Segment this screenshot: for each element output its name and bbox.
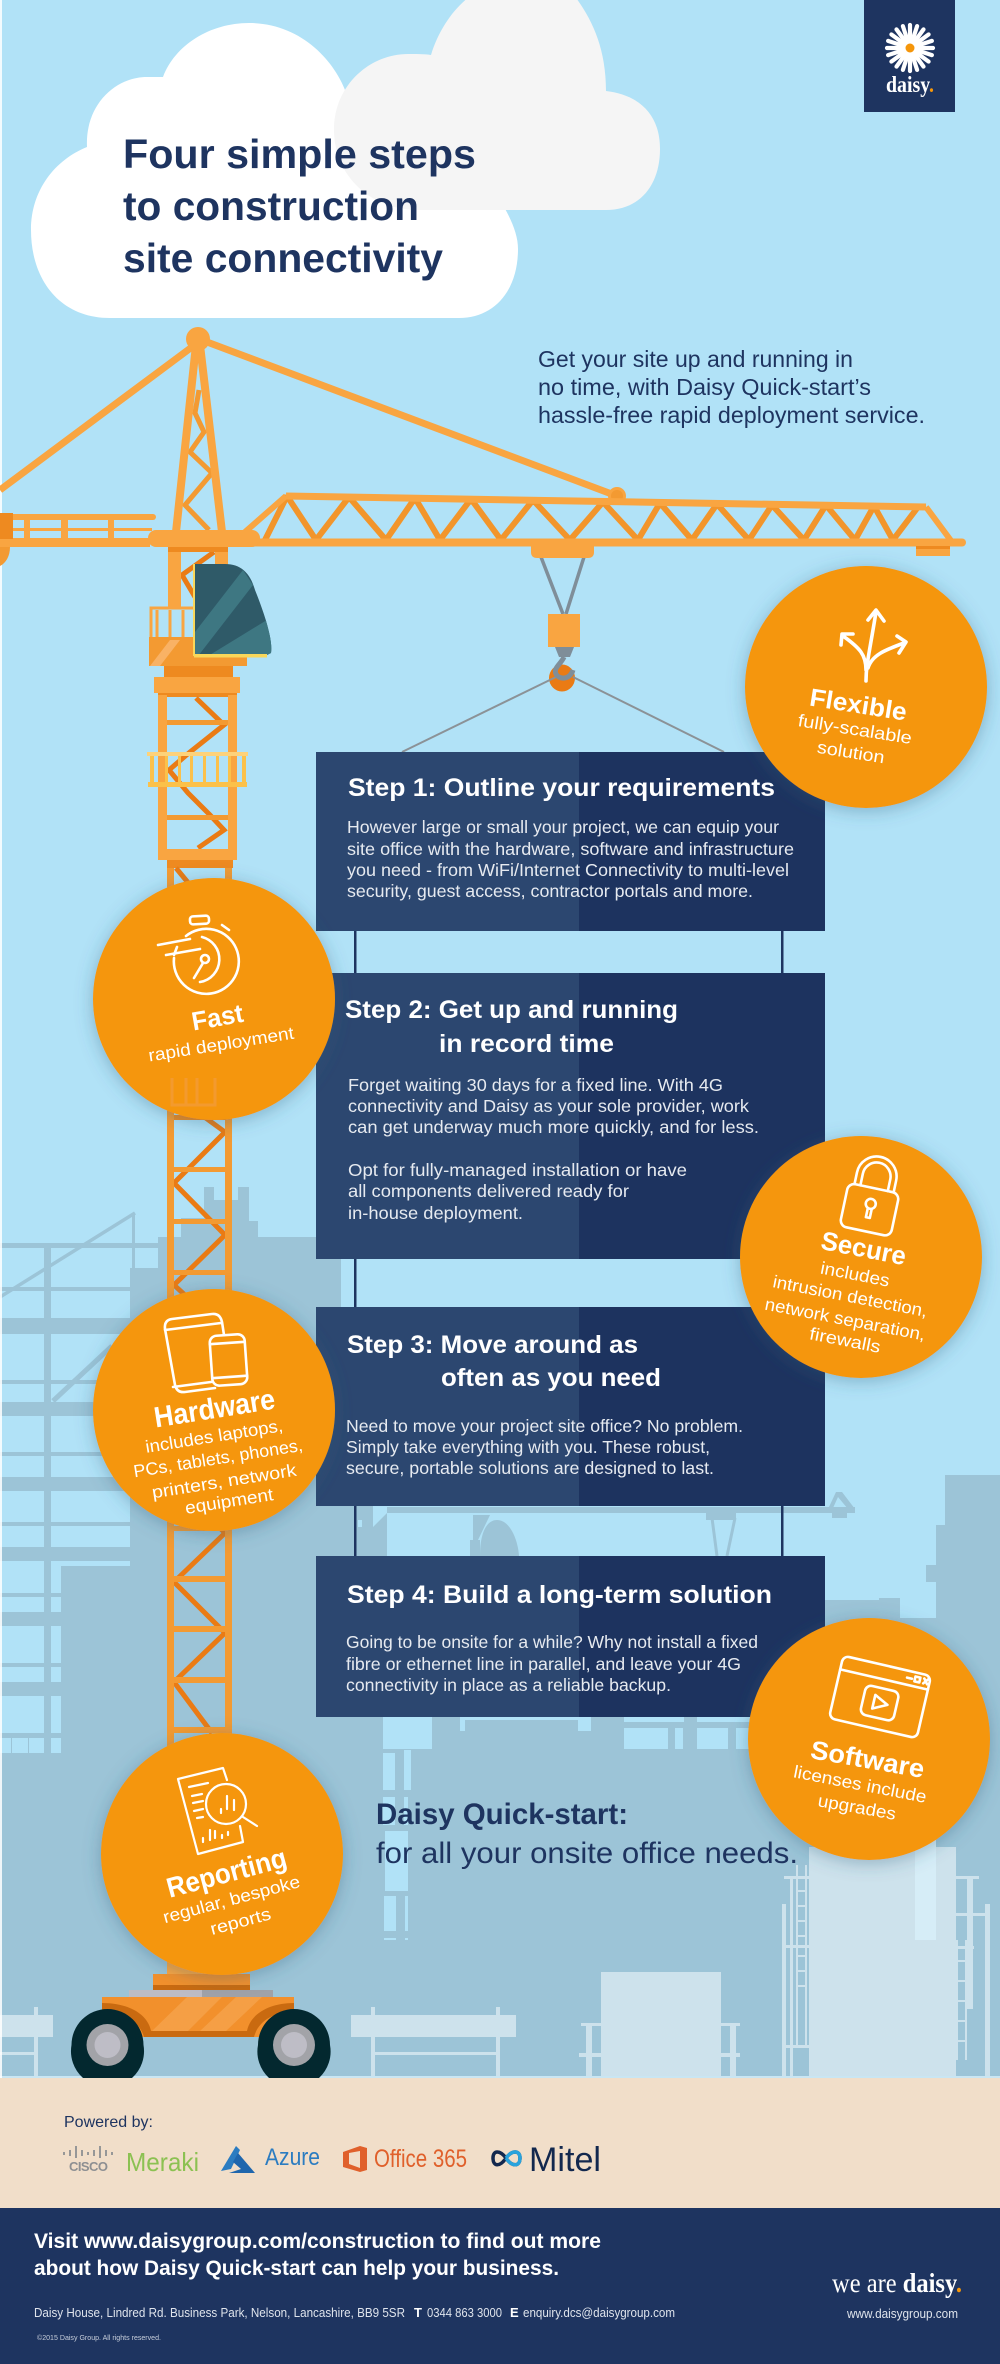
- secure label: firewalls: [808, 1323, 883, 1357]
- footer call to action: about how Daisy Quick-start can help your business.: [34, 2256, 559, 2280]
- logo: office 365: [343, 2145, 467, 2173]
- panel: step 1: [316, 752, 825, 931]
- title: to construction: [123, 183, 419, 229]
- icon: tablet and phone: [165, 1314, 248, 1392]
- crane balcony: [147, 752, 248, 787]
- step 4 body: fibre or ethernet line in parallel, and leave your 4G: [346, 1654, 741, 1674]
- footer call to action: Visit www.daisygroup.com/construction to find out more: [34, 2229, 601, 2253]
- step 1 body: security, guest access, contractor portals and more.: [347, 881, 753, 901]
- hardware label: PCs, tablets, phones,: [132, 1435, 304, 1481]
- hardware label: includes laptops,: [144, 1415, 284, 1457]
- secure label: [763, 1225, 929, 1357]
- step 1 body: you need - from WiFi/Internet Connectivity to multi-level: [347, 860, 789, 880]
- step 2 body: Forget waiting 30 days for a fixed line. With 4G: [348, 1075, 723, 1095]
- step 2 heading: in record time: [439, 1030, 614, 1058]
- logo: daisy: [864, 0, 955, 112]
- footer call to action: [34, 2229, 601, 2280]
- footer contact details: 0344 863 3000: [427, 2305, 502, 2320]
- step 1 heading: Step 1: Outline your requirements: [348, 774, 775, 802]
- secure label: network separation,: [763, 1294, 927, 1344]
- intro text: [538, 346, 925, 428]
- step 2 body: can get underway much more quickly, and for less.: [348, 1117, 759, 1137]
- footer contact details: enquiry.dcs@daisygroup.com: [523, 2305, 675, 2320]
- hardware label: Hardware: [152, 1384, 277, 1434]
- panel connectors: [354, 931, 784, 1556]
- step 4 heading: Step 4: Build a long-term solution: [347, 1581, 772, 1609]
- logo: mitel: Mitel: [529, 2141, 601, 2179]
- logo: azure: [221, 2144, 320, 2173]
- reporting label: reports: [208, 1903, 273, 1939]
- logo: cisco: [64, 2146, 112, 2174]
- crane hook assembly: [402, 545, 724, 752]
- footer contact details: [34, 2305, 675, 2320]
- title: site connectivity: [123, 235, 443, 281]
- white left edge: [0, 0, 2, 2078]
- crane cables: [0, 342, 617, 496]
- logo: meraki: Meraki: [126, 2147, 199, 2177]
- step 1 body: However large or small your project, we can equip your: [347, 817, 779, 837]
- reporting label: regular, bespoke: [161, 1871, 302, 1927]
- badge: reporting: [101, 1733, 343, 1975]
- crane cart and wheels: [71, 1974, 331, 2078]
- software label: [792, 1734, 928, 1824]
- powered by band: [0, 2078, 1000, 2208]
- panel: step 4: [316, 1556, 825, 1717]
- footer: [0, 2208, 1000, 2364]
- crane jib truss: [148, 496, 962, 556]
- step 4 body: connectivity in place as a reliable backup.: [346, 1675, 671, 1695]
- flexible label: Flexible: [808, 684, 909, 727]
- crane mast top: [176, 327, 624, 532]
- logo: cisco: CISCO: [69, 2159, 108, 2174]
- step 2 heading: [345, 996, 678, 1058]
- copyright: ©2015 Daisy Group. All rights reserved.: [37, 2333, 161, 2342]
- tagline: [376, 1798, 798, 1870]
- footer contact details: Daisy House, Lindred Rd. Business Park, Nelson, Lancashire, BB9 5SR: [34, 2305, 405, 2320]
- step 1 body: site office with the hardware, software and infrastructure: [347, 839, 794, 859]
- title: [123, 131, 476, 281]
- badge: hardware: [93, 1289, 335, 1531]
- hardware label: [132, 1384, 304, 1518]
- logo: office 365: Office 365: [374, 2145, 467, 2173]
- secure label: intrusion detection,: [771, 1271, 929, 1321]
- step 3 heading: often as you need: [441, 1364, 661, 1392]
- crane tower upper: [147, 547, 280, 868]
- construction site silhouette: [0, 1187, 1000, 2078]
- badge: flexible: [745, 566, 987, 808]
- icon: stopwatch: [158, 916, 239, 994]
- reporting label: Reporting: [163, 1842, 290, 1904]
- step 2 body: in-house deployment.: [348, 1203, 523, 1223]
- footer brand line: we are daisy.: [832, 2268, 962, 2298]
- step 3 heading: [347, 1331, 661, 1392]
- hardware label: printers, network: [150, 1460, 298, 1502]
- software label: upgrades: [816, 1790, 898, 1824]
- badge: software: [748, 1618, 990, 1860]
- step 2 body: all components delivered ready for: [348, 1181, 629, 1201]
- crane tower lower: [167, 868, 232, 1988]
- step 2 heading: Step 2: Get up and running: [345, 996, 678, 1024]
- cloud: grey: [334, 0, 660, 210]
- step 4 body: [346, 1632, 758, 1695]
- crane: [0, 327, 962, 2078]
- step 3 heading: Step 3: Move around as: [347, 1331, 638, 1359]
- step 3 body: Need to move your project site office? No problem.: [346, 1416, 743, 1436]
- title: Four simple steps: [123, 131, 476, 177]
- crane cabin: [193, 564, 272, 658]
- secure label: includes: [819, 1258, 892, 1291]
- step 3 body: Simply take everything with you. These robust,: [346, 1437, 710, 1457]
- flexible label: solution: [816, 737, 886, 767]
- icon: report and magnifier: [178, 1768, 257, 1854]
- intro text: Get your site up and running in: [538, 346, 853, 372]
- badge: fast: [93, 878, 335, 1120]
- tagline: for all your onsite office needs.: [376, 1837, 798, 1870]
- step 2 body: [348, 1075, 759, 1223]
- icon: application window: [829, 1656, 931, 1738]
- icon: daisy flower: [887, 25, 933, 71]
- powered by label: Powered by:: [64, 2114, 153, 2131]
- crane counter jib: [0, 513, 156, 566]
- flexible label: [797, 684, 913, 767]
- step 2 body: Opt for fully-managed installation or have: [348, 1160, 687, 1180]
- step 4 body: Going to be onsite for a while? Why not install a fixed: [346, 1632, 758, 1652]
- reporting label: [161, 1842, 302, 1939]
- badge: secure: [740, 1136, 982, 1378]
- panel: step 3: [316, 1307, 825, 1506]
- footer contact details: E: [510, 2305, 519, 2320]
- intro text: no time, with Daisy Quick-start’s: [538, 374, 871, 400]
- panel: step 2: [316, 973, 825, 1259]
- software label: licenses include: [792, 1761, 928, 1807]
- logo: mitel: [493, 2141, 601, 2179]
- footer website: www.daisygroup.com: [846, 2306, 958, 2321]
- icon: branching arrows: [841, 610, 906, 681]
- step 1 body: [347, 817, 794, 901]
- step 3 body: [346, 1416, 743, 1478]
- software label: Software: [808, 1734, 927, 1784]
- logo wordmark: daisy.: [886, 72, 934, 97]
- tagline: Daisy Quick-start:: [376, 1798, 628, 1831]
- fast label: [147, 998, 295, 1065]
- foreground pale buildings: [0, 1827, 1000, 2078]
- logo: azure: Azure: [265, 2144, 320, 2171]
- cloud: white: [31, 23, 518, 318]
- secure label: Secure: [819, 1225, 909, 1271]
- fast label: rapid deployment: [147, 1023, 295, 1065]
- step 3 body: secure, portable solutions are designed to last.: [346, 1458, 714, 1478]
- flexible label: fully-scalable: [797, 710, 913, 748]
- footer contact details: T: [414, 2305, 422, 2320]
- step 2 body: connectivity and Daisy as your sole provider, work: [348, 1096, 749, 1116]
- intro text: hassle-free rapid deployment service.: [538, 402, 925, 428]
- icon: padlock: [839, 1152, 906, 1237]
- fast label: Fast: [189, 998, 246, 1036]
- hardware label: equipment: [184, 1484, 275, 1518]
